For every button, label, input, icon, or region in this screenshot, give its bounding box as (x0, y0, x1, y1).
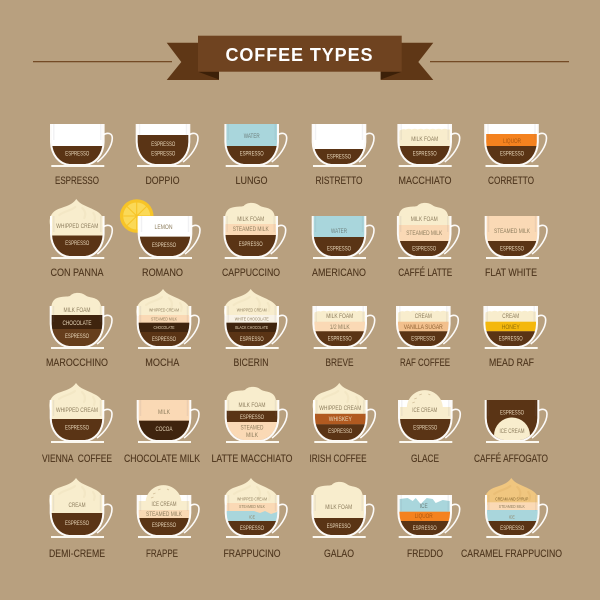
cup: americano (311, 216, 374, 279)
cup: galao: GALAO (324, 548, 354, 560)
cup: caffe affogato: CAFFÉ AFFOGATO (474, 452, 548, 465)
cup: frappe: ESPRESSO (152, 523, 176, 529)
cup: cappuccino: CAPPUCCINO (222, 267, 280, 279)
cup: latte macchiato: STEAMED (240, 426, 264, 432)
cup: vienna coffee: VIENNA COFFEE (42, 453, 112, 465)
cup: lungo: LUNGO (235, 175, 268, 187)
cup: con panna: CON PANNA (51, 267, 104, 279)
cup: espresso: ESPRESSO (55, 175, 99, 187)
cup: mocha (136, 289, 199, 369)
cup: freddo: ICE (420, 504, 428, 510)
cup: irish coffee: ESPRESSO (328, 429, 353, 435)
cup: chocolate milk: COCOA (156, 427, 172, 433)
cup: macchiato: ESPRESSO (413, 151, 437, 157)
cup: marocchino (46, 293, 112, 369)
cup: cappuccino: ESPRESSO (239, 242, 263, 248)
cup: caramel frappucino: CARAMEL FRAPPUCINO (461, 548, 562, 560)
cup: flat white: ESPRESSO (500, 246, 524, 252)
cup: frappe: STEAMED MILK (146, 512, 182, 518)
cup: breve: 1/2 MILK (330, 325, 350, 331)
cup: mead raf: HONEY (502, 325, 520, 331)
cup: glace (397, 390, 460, 465)
cup: americano: AMERICANO (312, 267, 366, 279)
cup: marocchino: ESPRESSO (65, 334, 89, 340)
cup: lungo: ESPRESSO (240, 151, 264, 157)
cup: breve: BREVE (326, 357, 354, 369)
cup: raf coffee: CREAM (415, 314, 432, 320)
cup: breve: MILK FOAM (326, 314, 353, 320)
cup: con panna (49, 199, 112, 279)
cup: glace: GLACE (411, 453, 439, 465)
cup: irish coffee (310, 383, 375, 465)
cup: latte macchiato: MILK FOAM (238, 403, 266, 409)
cup: vienna coffee: ESPRESSO (65, 426, 89, 432)
cup: romano: LEMON (154, 225, 172, 231)
cup: con panna: WHIPPED CREAM (56, 224, 98, 230)
cup: glace: ESPRESSO (413, 426, 438, 432)
cup: doppio: ESPRESSO (151, 151, 176, 157)
cup: vienna coffee: WHIPPED CREAM (56, 408, 98, 414)
cup: mocha: ESPRESSO (152, 337, 176, 343)
cup: ristretto: RISTRETTO (316, 175, 363, 187)
cup: bicerin: WHITE CHOCOLATE (235, 316, 269, 321)
cup: frappucino: STEAMED MILK (239, 504, 266, 509)
cup: raf coffee: RAF COFFEE (400, 357, 450, 369)
cup: flat white: FLAT WHITE (485, 267, 537, 279)
cup: caffe affogato: ESPRESSO (500, 410, 524, 416)
cup: mocha: STEAMED MILK (151, 316, 178, 321)
cup: frappucino: WHIPPED CREAM (237, 497, 267, 502)
cup: frappucino (224, 478, 287, 560)
cup: caramel frappucino: ESPRESSO (500, 526, 525, 532)
cup: americano: WATER (331, 229, 348, 235)
cup: marocchino: MILK FOAM (64, 308, 90, 314)
cup: frappucino: FRAPPUCINO (224, 548, 281, 560)
cup: caramel frappucino: CREAM AND SYRUP (495, 497, 528, 502)
cup: irish coffee: WHIPPED CREAM (319, 406, 361, 412)
cup: demi-creme: ESPRESSO (65, 521, 89, 527)
cup: bicerin (224, 289, 287, 369)
cup: cappuccino (222, 203, 286, 279)
cup: caramel frappucino (461, 478, 562, 560)
cup: freddo: ESPRESSO (413, 526, 437, 532)
cup: latte macchiato: ESPRESSO (240, 415, 264, 421)
cup: demi-creme: CREAM (68, 503, 86, 509)
cup: ristretto: ESPRESSO (327, 155, 351, 161)
cup: frappe: FRAPPE (146, 548, 178, 560)
cup: espresso (49, 124, 112, 187)
cup: frappucino: ESPRESSO (240, 526, 264, 532)
cup: chocolate milk (124, 400, 201, 465)
cup: caffe latte (396, 203, 459, 279)
cup: vienna coffee (42, 383, 112, 465)
cup: caffe affogato: ICE CREAM (500, 429, 524, 435)
cup: flat white: STEAMED MILK (494, 229, 530, 235)
cup: corretto (484, 124, 546, 187)
cup: bicerin: BLACK CHOCOLATE (235, 325, 268, 330)
cup: macchiato: MILK FOAM (411, 137, 438, 143)
cup: chocolate milk: MILK (158, 410, 170, 416)
cup: galao: ESPRESSO (327, 524, 351, 530)
cup: mead raf (483, 306, 546, 369)
icon: lemon slice (120, 199, 154, 233)
cup: caffe affogato (474, 400, 548, 465)
cup: cappuccino: STEAMED MILK (233, 227, 269, 233)
cup: mocha: WHIPPED CREAM (149, 308, 179, 313)
cup: raf coffee: VANILLA SUGAR (404, 325, 443, 331)
cup: mead raf: ESPRESSO (499, 336, 523, 342)
cup: latte macchiato: LATTE MACCHIATO (212, 453, 293, 465)
cup: irish coffee: IRISH COFFEE (309, 453, 366, 465)
cup: bicerin: WHIPPED CREAM (237, 308, 267, 313)
cup: mocha: MOCHA (145, 357, 180, 369)
cup: breve: ESPRESSO (328, 336, 352, 342)
cup: corretto: ESPRESSO (500, 151, 524, 157)
cup: caramel frappucino: STEAMED MILK (499, 504, 526, 509)
cup: galao (311, 482, 374, 560)
cup: romano: ESPRESSO (152, 243, 176, 249)
cup: bicerin: BICERIN (233, 357, 269, 369)
cup: lungo: WATER (244, 134, 260, 140)
cup: frappe (136, 485, 199, 560)
cup: frappucino: ICE (249, 514, 255, 519)
cup: doppio: DOPPIO (146, 175, 180, 187)
cup: macchiato: MACCHIATO (399, 175, 452, 187)
cup: romano: ROMANO (142, 267, 183, 279)
cup: con panna: ESPRESSO (65, 241, 90, 247)
cup: latte macchiato (212, 387, 293, 465)
cup: irish coffee: WHISKEY (329, 417, 352, 423)
cup: corretto: LIQUOR (503, 139, 522, 145)
cup: macchiato (397, 124, 460, 187)
cup: lungo (224, 124, 287, 187)
cup: americano: ESPRESSO (327, 246, 351, 252)
cup: demi-creme (49, 478, 112, 560)
cup: caffe latte: ESPRESSO (412, 246, 436, 252)
cup: demi-creme: DEMI-CREME (49, 548, 105, 560)
cup: galao: MILK FOAM (325, 505, 352, 511)
cup: caffe latte: MILK FOAM (411, 217, 438, 223)
cup: freddo: LIQUOR (415, 514, 433, 520)
cup: marocchino: MAROCCHINO (46, 357, 108, 369)
cup: caffe latte: STEAMED MILK (406, 231, 442, 237)
cup: freddo: FREDDO (407, 548, 443, 560)
cup: corretto: CORRETTO (488, 175, 534, 187)
cup: doppio (135, 124, 198, 187)
cup: caramel frappucino: ICE (509, 514, 515, 519)
cup: ristretto (311, 124, 374, 187)
cup: glace: ICE CREAM (412, 408, 437, 414)
cup: mead raf: CREAM (502, 314, 519, 320)
cup: mead raf: MEAD RAF (489, 357, 534, 369)
cup: frappe: ICE CREAM (152, 502, 176, 508)
cup: flat white (484, 216, 547, 279)
cup: latte macchiato: MILK (246, 433, 258, 439)
title banner (33, 36, 569, 80)
cup: mocha: CHOCOLATE (154, 325, 174, 330)
cup: cappuccino: MILK FOAM (237, 217, 264, 223)
cup: espresso: ESPRESSO (65, 151, 90, 157)
cup: romano (137, 216, 200, 279)
cup: freddo (397, 495, 460, 560)
cup: raf coffee (395, 306, 458, 369)
cup: caffe latte: CAFFÉ LATTE (398, 266, 452, 279)
cup: breve (312, 306, 375, 369)
cup: bicerin: ESPRESSO (240, 337, 264, 343)
cup: doppio: ESPRESSO (151, 142, 176, 148)
title: COFFEE TYPES (226, 45, 372, 65)
cup: chocolate milk: CHOCOLATE MILK (124, 453, 201, 465)
cup: marocchino: CHOCOLATE (62, 321, 92, 327)
cup: raf coffee: ESPRESSO (411, 336, 436, 342)
